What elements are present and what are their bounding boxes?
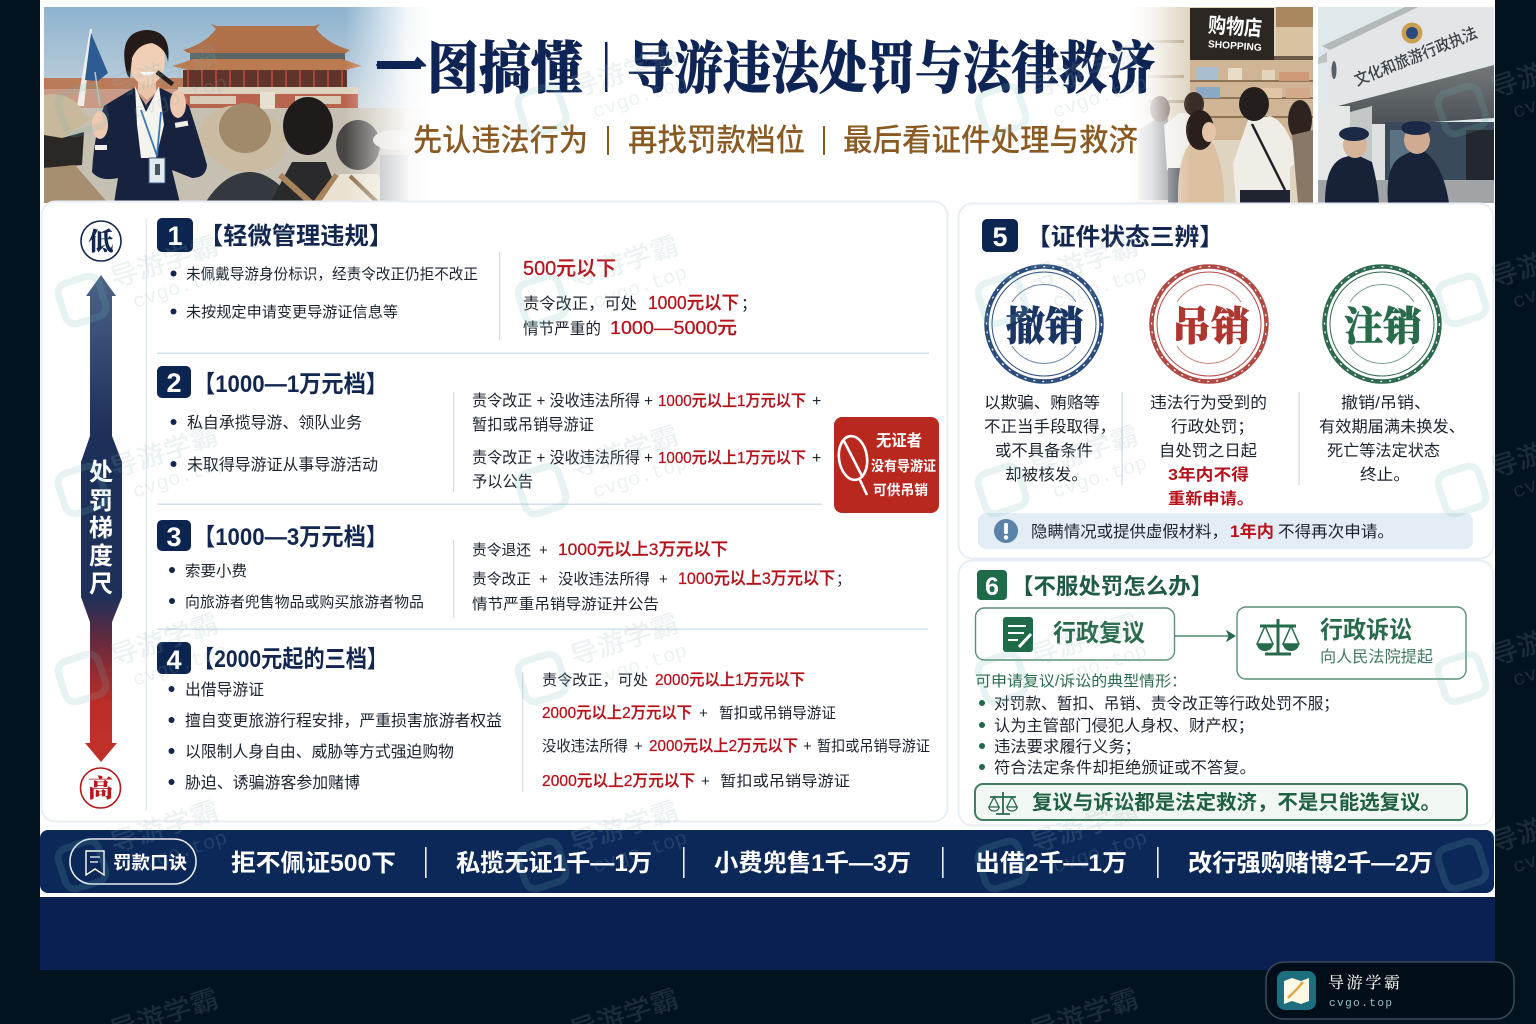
arrow: [1174, 631, 1235, 641]
store sign: SHOPPING: [1208, 39, 1262, 54]
section 1: 未佩戴导游身份标识，经责令改正仍拒不改正: [186, 266, 478, 283]
palace: [172, 24, 362, 109]
notice bar: [978, 513, 1473, 549]
callout: both are remedies: 复议与诉讼都是法定救济，不是只能选复议。: [1032, 790, 1441, 814]
watermark layer: cvgo.top: [1050, 827, 1150, 880]
scale low marker: 低: [88, 228, 114, 256]
section 3: +: [659, 571, 668, 588]
section 4: 没收违法所得: [542, 738, 628, 755]
revoke description: 不正当手段取得，: [984, 418, 1116, 436]
section 4: +: [634, 738, 643, 755]
panel: penalty tiers: [42, 202, 948, 822]
section 4: 胁迫、诱骗游客参加赌博: [185, 774, 360, 792]
revoke description: 或不具备条件: [995, 442, 1093, 460]
watermark layer: 导游学霸: [1026, 795, 1142, 858]
panel: licence status: [958, 204, 1494, 558]
section 1: 情节严重的: [523, 320, 601, 338]
section 2: 1000元以上1万元以下: [658, 449, 806, 467]
suspend description: 行政处罚；: [1171, 418, 1254, 436]
cancel description: [1319, 394, 1465, 484]
section 3: 1000元以上3万元以下: [678, 569, 835, 588]
watermark layer: 导游学霸: [566, 420, 682, 483]
stamp: suspend: [1152, 266, 1266, 382]
section 4: 暂扣或吊销导游证: [720, 773, 850, 790]
callout: both are remedies: [975, 784, 1467, 820]
bottom mnemonic bar: [40, 830, 1494, 893]
typical cases list: [975, 672, 1339, 777]
watermark layer: cvgo.top: [590, 72, 690, 125]
notice bar: 不得再次申请。: [1278, 523, 1394, 541]
section 2: 未取得导游证从事导游活动: [187, 456, 378, 474]
watermark layer: 导游学霸: [1026, 230, 1142, 293]
section 3: 情节严重吊销导游证并公告: [472, 596, 659, 613]
section 3: 索要小费: [185, 563, 247, 580]
section 4: 擅自变更旅游行程安排，严重损害旅游者权益: [185, 711, 502, 730]
typical cases list: 可申请复议/诉讼的典型情形：: [975, 672, 1187, 690]
section 4: 出借导游证: [185, 681, 264, 699]
section 1: 1: [167, 221, 183, 251]
suspend description: 3年内不得: [1168, 465, 1249, 484]
bottom mnemonic bar: 改行强购赌博2千—2万: [1188, 850, 1433, 877]
watermark layer: cvgo.top: [130, 640, 230, 693]
box: administrative litigation: [1237, 607, 1466, 679]
box: administrative litigation: 向人民法院提起: [1320, 648, 1433, 666]
building name: 文化和旅游行政执法: [1351, 23, 1480, 90]
stamp: suspend: 吊销: [1172, 304, 1250, 349]
scale high marker: [80, 768, 120, 808]
panel: remedies: 6: [985, 573, 999, 601]
watermark layer: 导游学霸: [1026, 608, 1142, 671]
section 3: 3: [166, 522, 182, 552]
watermark layer: cvgo.top: [130, 72, 230, 125]
subtitle: 再找罚款档位: [628, 123, 805, 158]
suspend description: 重新申请。: [1168, 489, 1254, 508]
scale high marker: 高: [88, 774, 113, 803]
section 3: 向旅游者兜售物品或购买旅游者物品: [185, 593, 424, 611]
section 2: 2: [166, 368, 182, 398]
section 2: 【1000—1万元档】: [193, 371, 388, 398]
section 3: 1000元以上3万元以下: [558, 540, 728, 559]
section 3: +: [539, 571, 548, 588]
title: 一图搞懂: [375, 39, 583, 101]
watermark layer: cvgo.top: [1050, 72, 1150, 125]
revoke description: [984, 394, 1116, 484]
section 2: +: [812, 393, 821, 410]
watermark layer: 导游学霸: [1026, 420, 1142, 483]
watermark layer: 导游学霸: [106, 230, 222, 293]
section 1: 责令改正，可处: [523, 295, 637, 313]
brand badge: 导游学霸: [1328, 974, 1400, 992]
mnemonic pill: 罚款口诀: [113, 853, 187, 873]
shoppers: [1138, 87, 1313, 203]
revoke description: 以欺骗、贿赂等: [984, 394, 1100, 412]
section 2: 予以公告: [472, 473, 533, 491]
section 2: 责令改正 + 没收违法所得 +: [472, 392, 653, 410]
header photo: guide at the Forbidden City: [44, 7, 434, 203]
watermark layer: 导游学霸: [566, 40, 682, 103]
section 2: [157, 366, 821, 492]
section 4: 2000元以上1万元以下: [655, 671, 805, 689]
watermark layer: cvgo.top: [130, 262, 230, 315]
mnemonic pill: [70, 839, 196, 884]
tourists: [44, 94, 417, 203]
watermark layer: 导游学霸: [566, 795, 682, 858]
section 1: 500元以下: [523, 258, 616, 280]
panel: licence status: 【证件状态三辨】: [1026, 224, 1224, 251]
suspend description: 自处罚之日起: [1159, 442, 1257, 460]
cancel description: 撤销/吊销、: [1341, 394, 1431, 412]
subtitle: [413, 123, 1138, 158]
penalty scale arrow: 处: [89, 459, 113, 486]
bottom mnemonic bar: 小费兜售1千—3万: [714, 850, 911, 877]
section 2: +: [812, 450, 821, 467]
callout: no guide card: 可供吊销: [873, 482, 928, 498]
section 2: 私自承揽导游、领队业务: [187, 414, 362, 432]
section 2: 1000元以上1万元以下: [658, 392, 806, 410]
section 4: [157, 642, 930, 792]
section 1: ；: [741, 296, 757, 313]
header photo: shopping store: [1130, 7, 1313, 203]
section 4: 暂扣或吊销导游证: [719, 705, 836, 722]
section 1: 1000元以下: [648, 293, 739, 313]
typical cases list: 对罚款、暂扣、吊销、责令改正等行政处罚不服；: [994, 695, 1339, 713]
stamp: cancel: [1324, 266, 1440, 382]
penalty scale arrow: 尺: [89, 571, 113, 598]
title: [375, 39, 1155, 101]
section 2: 责令改正 + 没收违法所得 +: [472, 449, 653, 467]
watermark layer: 导游学霸: [106, 795, 222, 858]
penalty scale arrow: [81, 275, 122, 762]
section 4: 【2000元起的三档】: [193, 646, 388, 673]
watermark layer: cvgo.top: [1050, 452, 1150, 505]
watermark layer: cvgo.top: [1050, 640, 1150, 693]
section 3: 责令退还: [472, 542, 531, 559]
brand badge: cvgo.top: [1329, 998, 1392, 1010]
watermark layer: cvgo.top: [590, 262, 690, 315]
watermark layer: cvgo.top: [590, 452, 690, 505]
suspend description: 违法行为受到的: [1150, 394, 1267, 412]
section 2: 暂扣或吊销导游证: [472, 416, 594, 434]
watermark layer: 导游学霸: [106, 40, 222, 103]
penalty scale arrow: 度: [89, 543, 113, 570]
bottom mnemonic bar: 私揽无证1千—1万: [456, 850, 652, 877]
watermark layer: 导游学霸: [1026, 40, 1142, 103]
cancel description: 有效期届满未换发、: [1319, 418, 1465, 436]
guide: [77, 29, 207, 203]
section 1: 1000—5000元: [610, 318, 737, 338]
section 3: [157, 520, 851, 618]
cancel description: 终止。: [1360, 466, 1410, 484]
cancel description: 死亡等法定状态: [1327, 442, 1440, 460]
box: administrative review: [976, 608, 1174, 660]
section 4: 责令改正，可处: [542, 672, 648, 689]
officers: [1325, 121, 1449, 203]
watermark layer: 导游学霸: [566, 230, 682, 293]
suspend description: [1150, 394, 1267, 508]
scale low marker: [81, 221, 121, 261]
section 3: 责令改正: [472, 571, 531, 588]
watermark layer: 导游学霸: [566, 608, 682, 671]
bottom mnemonic bar: 拒不佩证500下: [231, 850, 396, 877]
watermark layer: 导游学霸: [106, 608, 222, 671]
section 4: 2000元以上2万元以下: [649, 737, 798, 755]
stamp: cancel: 注销: [1344, 304, 1422, 349]
section 1: [157, 218, 757, 340]
revoke description: 却被核发。: [1005, 466, 1088, 484]
subtitle: 最后看证件处理与救济: [843, 123, 1138, 158]
section 3: +: [539, 542, 548, 559]
stamp: revoke: 撤销: [1006, 304, 1084, 349]
section 1: 未按规定申请变更导游证信息等: [186, 303, 398, 321]
store sign: 购物店: [1207, 14, 1263, 41]
callout: no guide card: [834, 417, 939, 513]
callout: no guide card: 无证者: [876, 432, 922, 450]
police emblem: [1402, 22, 1422, 44]
section 4: 4: [166, 645, 182, 675]
callout: no guide card: 没有导游证: [871, 458, 936, 474]
notice bar: 隐瞒情况或提供虚假材料，: [1031, 523, 1228, 541]
store sign: [1190, 8, 1274, 60]
watermark layer: cvgo.top: [130, 827, 230, 880]
watermark layer: cvgo.top: [590, 827, 690, 880]
panel: licence status: 5: [992, 222, 1008, 252]
section 4: 2000元以上2万元以下: [542, 772, 695, 790]
brand badge: [1266, 962, 1514, 1019]
section 3: 没收违法所得: [558, 571, 650, 588]
section 1: 【轻微管理违规】: [199, 223, 393, 250]
watermark layer: cvgo.top: [590, 640, 690, 693]
box: administrative review: 行政复议: [1053, 620, 1145, 647]
penalty scale arrow: 罚: [89, 488, 113, 515]
penalty scale arrow: 梯: [89, 515, 113, 542]
panel: remedies: 【不服处罚怎么办】: [1011, 574, 1213, 599]
subtitle: 先认违法行为: [413, 123, 588, 158]
watermark layer: 导游学霸: [106, 420, 222, 483]
section 4: 暂扣或吊销导游证: [817, 738, 930, 755]
section 3: 【1000—3万元档】: [193, 524, 388, 551]
notice bar: 1年内: [1230, 521, 1274, 541]
typical cases list: 符合法定条件却拒绝颁证或不答复。: [994, 759, 1256, 777]
stamp: revoke: [986, 266, 1102, 382]
panel: remedies: [958, 560, 1494, 826]
watermark layer: cvgo.top: [1050, 262, 1150, 315]
bottom mnemonic bar: 出借2千—1万: [975, 850, 1127, 877]
icon: map logo: [1277, 971, 1316, 1010]
section 3: ；: [836, 571, 851, 588]
watermark layer: cvgo.top: [130, 452, 230, 505]
header photo: enforcement office: [1318, 7, 1494, 203]
title: 导游违法处罚与法律救济: [627, 39, 1155, 101]
section 4: +: [701, 773, 710, 790]
typical cases list: 违法要求履行义务；: [994, 738, 1141, 756]
section 4: 以限制人身自由、威胁等方式强迫购物: [185, 743, 454, 761]
section 4: +: [699, 705, 708, 722]
typical cases list: 认为主管部门侵犯人身权、财产权；: [994, 717, 1254, 735]
box: administrative litigation: 行政诉讼: [1320, 617, 1412, 644]
section 4: +: [803, 738, 812, 755]
section 4: 2000元以上2万元以下: [542, 704, 692, 722]
